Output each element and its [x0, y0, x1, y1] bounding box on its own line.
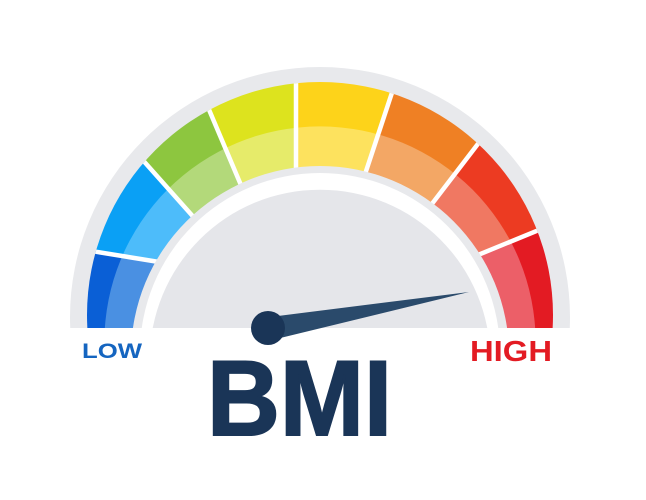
gauge — [70, 67, 570, 328]
colored segments outer band — [87, 82, 553, 328]
label: HIGH: HIGH — [470, 336, 552, 368]
label: LOW: LOW — [82, 340, 142, 363]
inner grey ring — [132, 166, 507, 328]
colored segments inner light band — [104, 126, 536, 328]
title: BMI: BMI — [207, 338, 392, 458]
gauge background ring — [70, 67, 570, 328]
segment separators — [95, 83, 538, 264]
dial face — [152, 190, 488, 328]
needle — [251, 292, 469, 345]
BMI gauge infographic — [70, 67, 570, 436]
white gap — [142, 173, 498, 328]
